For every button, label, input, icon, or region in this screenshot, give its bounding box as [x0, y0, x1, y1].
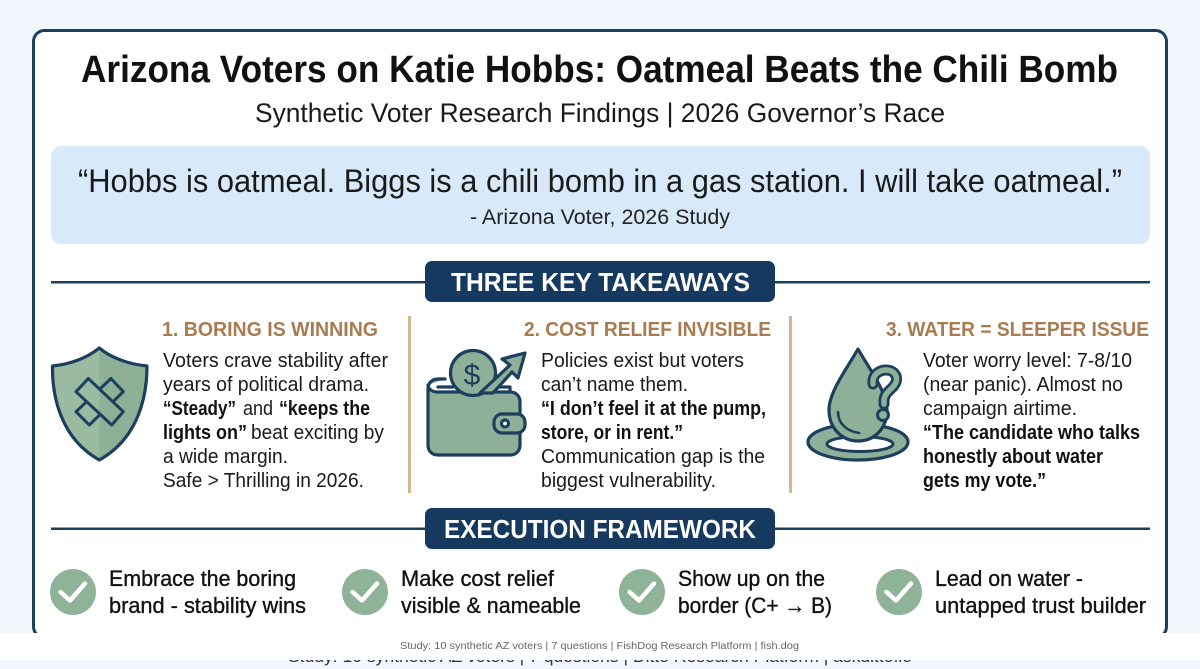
- takeaway 3 text: (near panic). Almost no: [923, 374, 1123, 396]
- takeaway 1 text: Safe > Thrilling in 2026.: [163, 470, 364, 492]
- execution item 4: Lead on water -: [935, 566, 1083, 591]
- takeaway 1 text: [163, 350, 388, 492]
- section heading: execution framework: [51, 508, 1150, 549]
- panel: takeaway 1: [52, 319, 388, 492]
- section heading: execution framework: EXECUTION FRAMEWORK: [444, 514, 756, 544]
- title: Arizona Voters on Katie Hobbs: Oatmeal Beats the Chili Bomb: [81, 49, 1118, 91]
- takeaway 2 text: store, or in rent.”: [541, 422, 683, 444]
- section heading: three key takeaways: [51, 261, 1150, 302]
- panel: takeaway 3: [808, 319, 1149, 492]
- execution item 3: [619, 566, 832, 618]
- takeaway 2 text: “I don’t feel it at the pump,: [541, 398, 766, 420]
- quote text: “Hobbs is oatmeal. Biggs is a chili bomb in a gas station. I will take oatmeal.”: [78, 163, 1122, 199]
- icon: water drop with question mark: [808, 349, 908, 460]
- panel: quote: [51, 146, 1150, 244]
- panel: takeaway 2: [428, 350, 525, 455]
- execution item 2: [342, 566, 581, 618]
- takeaway 2 text: Policies exist but voters: [541, 350, 744, 372]
- quote attribution: - Arizona Voter, 2026 Study: [470, 206, 730, 229]
- execution item 3: border (C+ → B): [678, 593, 832, 618]
- takeaway 1 text: “Steady”: [163, 398, 236, 420]
- takeaway 2 text: biggest vulnerability.: [541, 470, 716, 492]
- takeaway 2 text: [541, 350, 766, 492]
- takeaway 3 text: “The candidate who talks: [923, 422, 1140, 444]
- takeaway 1 text: lights on”: [163, 422, 247, 444]
- icon: shield: [52, 348, 147, 460]
- footer strip: [0, 633, 1200, 660]
- takeaway 3 text: campaign airtime.: [923, 398, 1077, 420]
- takeaway 3 text: honestly about water: [923, 446, 1103, 468]
- execution item 4: [876, 566, 1146, 618]
- takeaway 1 text: years of political drama.: [163, 374, 369, 396]
- icon: wallet with coin and arrow: [428, 350, 525, 455]
- takeaway 1 text: “keeps the: [279, 398, 370, 420]
- takeaway 1 heading: 1. BORING IS WINNING: [162, 319, 378, 341]
- execution item 2: Make cost relief: [401, 566, 555, 591]
- execution item 1: [50, 566, 306, 618]
- takeaway 2 text: can’t name them.: [541, 374, 688, 396]
- execution item 1: Embrace the boring: [109, 566, 296, 591]
- takeaway 1 text: a wide margin.: [163, 446, 288, 468]
- takeaway 1 text: and: [243, 398, 273, 420]
- footer strip: Study: 10 synthetic AZ voters | 7 questions | FishDog Research Platform | fish.dog: [400, 640, 799, 652]
- clipped source line behind footer: Study: 10 synthetic AZ voters | 7 questions | Ditto Research Platform | askditto.io: [288, 647, 912, 666]
- takeaway 3 heading: 3. WATER = SLEEPER ISSUE: [886, 319, 1149, 341]
- takeaway 3 text: [923, 350, 1140, 492]
- takeaway 1 text: Voters crave stability after: [163, 350, 388, 372]
- execution item 2: visible & nameable: [401, 593, 581, 618]
- execution item 1: brand - stability wins: [109, 593, 306, 618]
- execution item 4: untapped trust builder: [935, 593, 1146, 618]
- takeaway 2 heading: 2. COST RELIEF INVISIBLE: [524, 319, 771, 341]
- icon: dollar sign: $: [464, 359, 481, 392]
- execution item 3: Show up on the: [678, 566, 825, 591]
- takeaway 2 text: Communication gap is the: [541, 446, 765, 468]
- subtitle: Synthetic Voter Research Findings | 2026 Governor’s Race: [255, 98, 945, 128]
- takeaway 3 text: gets my vote.”: [923, 470, 1046, 492]
- takeaway 1 text: beat exciting by: [251, 422, 384, 444]
- section heading: three key takeaways: THREE KEY TAKEAWAYS: [451, 267, 750, 297]
- takeaway 3 text: Voter worry level: 7-8/10: [923, 350, 1132, 372]
